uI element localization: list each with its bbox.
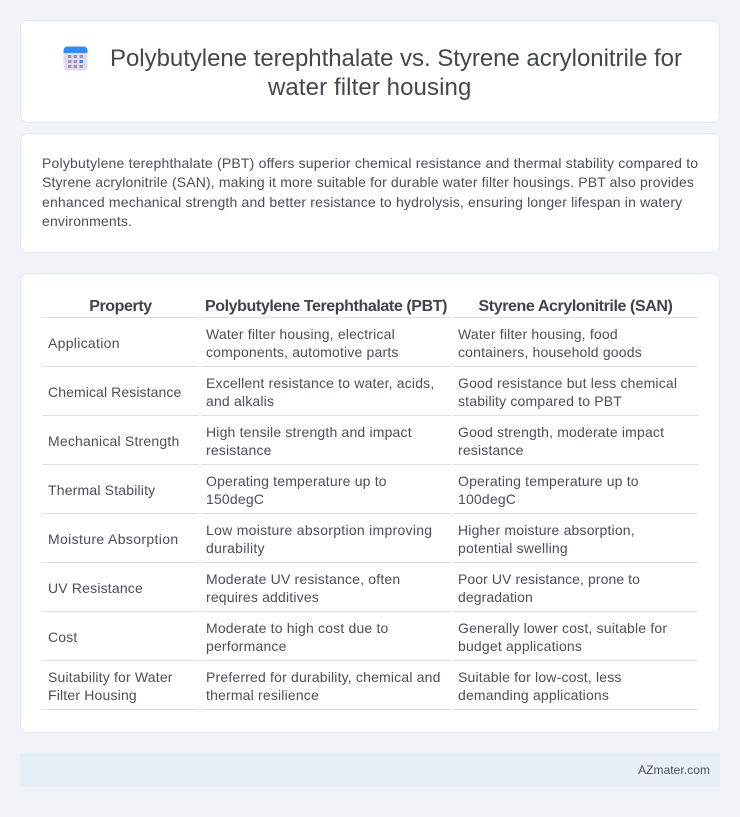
row: chemical resistance: Chemical Resistance [48,384,181,400]
row: chemical resistance: Excellent resistance to water, acids, [206,375,434,391]
title: Polybutylene terephthalate vs. Styrene acrylonitrile for [110,45,682,72]
row: cost: Generally lower cost, suitable for [458,620,667,636]
footer credit: AZmater.com [638,763,710,777]
row: chemical resistance: and alkalis [206,393,274,409]
row: application [42,326,698,367]
row: moisture absorption: potential swelling [458,540,568,556]
row: chemical resistance [42,375,698,416]
row: thermal stability: 150degC [206,491,264,507]
row: thermal stability: Operating temperature up to [458,473,639,489]
row: suitability: demanding applications [458,687,609,703]
row: thermal stability: 100degC [458,491,516,507]
row: uv resistance [42,571,698,612]
row: thermal stability [42,473,698,514]
row: cost [42,620,698,661]
row: application: Water filter housing, electrical [206,326,395,342]
row: moisture absorption: Moisture Absorption [48,531,179,547]
row: uv resistance: requires additives [206,589,319,605]
row: application: Application [48,335,120,351]
title card [20,20,720,123]
row: mechanical strength: High tensile strength and impact [206,424,412,440]
row: moisture absorption: Higher moisture absorption, [458,522,635,538]
row: mechanical strength: resistance [458,442,524,458]
row: suitability: Suitable for low-cost, less [458,669,622,685]
row: moisture absorption [42,522,698,563]
row: application: components, automotive parts [206,344,399,360]
row: application: Water filter housing, food [458,326,618,342]
intro text: Styrene acrylonitrile (SAN), making it more suitable for durable water filter housings. PBT also provides [42,174,694,190]
intro text: environments. [42,213,132,229]
row: suitability: Filter Housing [48,687,137,703]
title [110,45,682,101]
row: cost: performance [206,638,287,654]
header row [42,298,698,318]
row: mechanical strength: Good strength, moderate impact [458,424,664,440]
row: mechanical strength: resistance [206,442,272,458]
row: thermal stability: Thermal Stability [48,482,155,498]
row: cost: Moderate to high cost due to [206,620,388,636]
row: mechanical strength: Mechanical Strength [48,433,179,449]
header row: Styrene Acrylonitrile (SAN) [478,298,672,315]
row: uv resistance: Poor UV resistance, prone to [458,571,640,587]
row: suitability: thermal resilience [206,687,319,703]
row: chemical resistance: stability compared to PBT [458,393,622,409]
header row: Property [89,298,152,315]
row: uv resistance: degradation [458,589,533,605]
row: mechanical strength [42,424,698,465]
row: moisture absorption: Low moisture absorption improving [206,522,432,538]
header row: Polybutylene Terephthalate (PBT) [205,298,447,315]
table card [20,273,720,733]
intro card [20,133,720,253]
row: uv resistance: UV Resistance [48,580,143,596]
row: thermal stability: Operating temperature up to [206,473,387,489]
row: cost: Cost [48,629,78,645]
title: water filter housing [268,74,471,101]
row: moisture absorption: durability [206,540,265,556]
intro text: enhanced mechanical strength and better resistance to hydrolysis, ensuring longer lifespan in watery [42,194,682,210]
row: suitability: Preferred for durability, chemical and [206,669,441,685]
icon: calendar [64,46,88,70]
row: chemical resistance: Good resistance but less chemical [458,375,677,391]
row: uv resistance: Moderate UV resistance, often [206,571,400,587]
row: suitability [42,669,698,710]
intro text: Polybutylene terephthalate (PBT) offers superior chemical resistance and thermal stability compared to [42,155,698,171]
row: application: containers, household goods [458,344,642,360]
row: suitability: Suitability for Water [48,669,173,685]
row: cost: budget applications [458,638,582,654]
intro text [42,155,698,229]
footer bar [20,753,720,787]
